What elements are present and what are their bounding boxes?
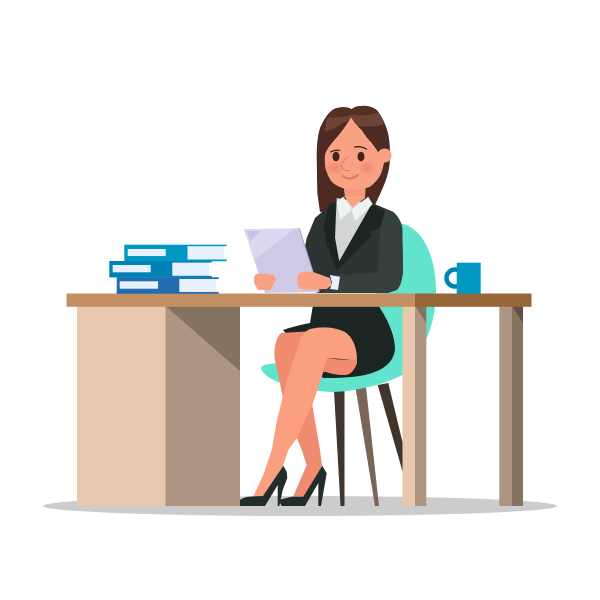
- hair top: [326, 106, 378, 120]
- ear: [378, 148, 392, 162]
- stack of books: [109, 245, 227, 294]
- front leg: [253, 327, 357, 497]
- middle book: [109, 261, 212, 277]
- hair: [317, 106, 390, 212]
- lapels: [323, 202, 339, 271]
- hands: [254, 272, 332, 290]
- neck: [343, 182, 366, 208]
- mouth: [342, 175, 358, 179]
- tablet: [244, 228, 319, 293]
- nose: [342, 157, 350, 171]
- mug: [446, 263, 481, 294]
- neck point: [344, 196, 365, 208]
- chair: [261, 224, 436, 506]
- left cabinet: [77, 306, 240, 506]
- back right leg: [499, 306, 523, 506]
- chair back: [370, 224, 436, 376]
- thigh underside: [324, 358, 357, 375]
- desk: [66, 294, 532, 506]
- desktop: [66, 294, 532, 307]
- bottom book: [117, 277, 219, 294]
- blush: [327, 163, 374, 173]
- back leg: [274, 330, 330, 497]
- jacket: [305, 197, 403, 293]
- front right leg: [402, 306, 426, 506]
- eyes and brows: [330, 147, 367, 161]
- collar: [337, 197, 373, 221]
- shirt cuff: [330, 275, 340, 290]
- sleeve: [322, 210, 403, 293]
- shirt: [335, 198, 372, 262]
- woman: [240, 106, 403, 506]
- shoes: [240, 466, 327, 506]
- skirt: [283, 305, 395, 378]
- face: [325, 117, 385, 189]
- floor shadow: [43, 496, 557, 516]
- chair legs: [334, 383, 403, 506]
- top book: [124, 245, 227, 261]
- hair highlight band: [325, 112, 384, 132]
- chair seat: [261, 338, 404, 392]
